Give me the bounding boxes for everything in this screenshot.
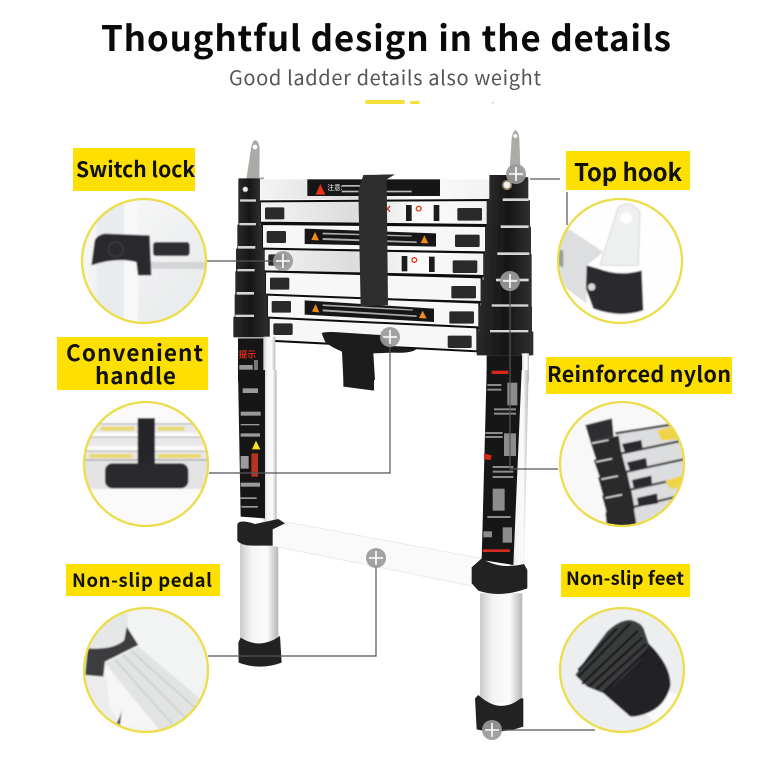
handle grip bottom [343,370,374,391]
detail circle: top hook [557,198,683,324]
right collar [472,558,527,594]
connector marker: handle [380,327,400,347]
label: convenient handle: Convenient [66,336,204,368]
top rung with warning label: 注意: [327,182,343,192]
label: non-slip feet: Non-slip feet [566,565,684,591]
right stile tube [510,370,529,570]
left stile tube [263,370,277,522]
right lower stile top [487,353,529,382]
right foot [475,695,523,732]
left collar [237,519,285,546]
connector marker: pedal [366,548,386,568]
detail circle: reinforced nylon [559,401,685,527]
label: convenient handle [57,336,208,391]
right bolt [503,181,511,189]
left lower stile top: 提示 [239,348,256,360]
connector marker: reinforced nylon [500,271,520,291]
yellow accent bar [365,100,494,104]
left foot [238,636,282,667]
right silver bands [490,198,529,332]
rungs [260,200,488,351]
top rung with warning label [258,179,490,199]
label: convenient handle: handle [95,359,176,391]
label: non-slip pedal: Non-slip pedal [72,567,212,593]
label: top hook: Top hook [574,153,682,188]
left silver bands [235,199,256,317]
label: reinforced nylon: Reinforced nylon [547,358,731,389]
ladder upper section [233,130,533,382]
subtitle: Good ladder details also weight [229,62,541,91]
connector lines [207,179,595,730]
label: switch lock: Switch lock [76,154,195,184]
detail circle: switch lock [81,198,207,324]
left bolt [243,187,248,192]
right black hinge stack [477,175,533,355]
right lower tube [480,593,522,703]
ladder lower section [237,370,529,732]
rung end slots [265,207,482,348]
right stile label [482,370,522,565]
connector marker: feet [482,720,502,740]
folding handle [322,332,417,380]
rung pictograms [385,205,439,272]
left lower tube [240,544,278,642]
connector marker: top hook [506,164,526,184]
detail circle: non-slip pedal [83,607,209,733]
right top hook [509,130,521,175]
left black hinge stack [233,178,269,337]
pedal bar [272,522,482,586]
rung warning labels [305,229,436,322]
left lower stile top [238,337,275,382]
black strap [358,174,395,307]
title: Thoughtful design in the details [101,11,671,62]
left stile label [238,370,265,518]
ladder [233,130,533,732]
detail circle: non-slip feet [559,607,685,733]
detail circle: convenient handle [83,401,209,527]
label: switch lock [73,148,195,191]
left top hook [247,140,264,179]
connector marker: switch lock [273,251,293,271]
